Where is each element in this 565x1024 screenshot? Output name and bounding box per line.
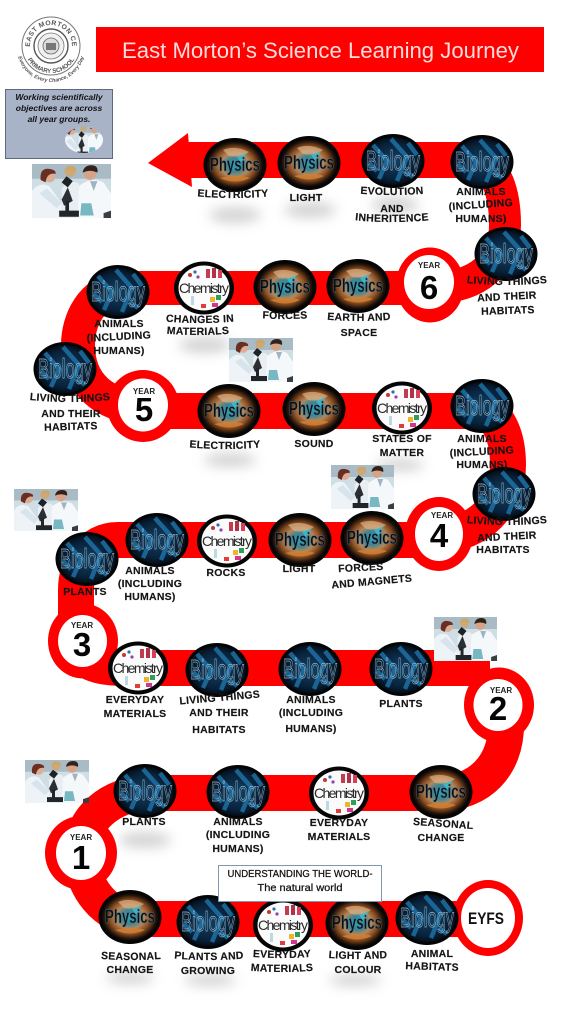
badge: Physics, light and colour: Physics	[332, 913, 382, 934]
badge: Chemistry, everyday materials Y2: Chemistry	[113, 660, 163, 676]
label: animals Y2	[279, 694, 343, 735]
label: living things Y2: HABITATS	[192, 724, 246, 736]
badge: Physics, earth and space	[326, 259, 390, 313]
label: forces and magnets	[331, 561, 413, 592]
label: forces and magnets: AND MAGNETS	[331, 573, 413, 592]
label: rocks: ROCKS	[206, 567, 246, 579]
label: forces and magnets: FORCES	[338, 561, 384, 575]
badge: Physics, seasonal change Y1: Physics	[416, 782, 466, 803]
label: changes in materials	[166, 314, 234, 336]
label: animal habitats: ANIMAL	[411, 948, 453, 960]
year marker: 5: 5	[135, 391, 153, 428]
note: understanding the world	[218, 866, 382, 902]
badge: Biology, plants and growing: Biology	[181, 906, 235, 937]
badge: Physics, seasonal change Y1	[410, 765, 472, 819]
label: earth and space	[328, 312, 390, 339]
label: living things Y6: LIVING THINGS	[467, 276, 547, 286]
badge: Biology, animals Y4: Biology	[455, 390, 509, 421]
label: plants Y2: PLANTS	[379, 698, 423, 710]
label: plants Y3: PLANTS	[63, 586, 107, 598]
label: seasonal change EYFS	[101, 952, 161, 976]
logo: school crest: EAST MORTON CE	[25, 20, 77, 46]
badge: Physics, electricity Y4	[198, 384, 260, 438]
label: animals Y3: ANIMALS	[125, 565, 175, 577]
logo: school crest	[18, 16, 84, 82]
badge: Physics, light Y6	[278, 136, 340, 190]
year marker: 4: 4	[430, 517, 449, 554]
badge: Physics, electricity Y4: Physics	[204, 401, 254, 422]
photo: scientists at microscope	[14, 489, 78, 531]
badge: Biology, living things Y2: Biology	[190, 654, 244, 685]
label: living things Y2: LIVING THINGS	[179, 689, 261, 708]
label: animals Y3	[118, 565, 182, 603]
label: animals Y5: (INCLUDING	[86, 329, 151, 345]
label: living things Y4	[467, 516, 547, 556]
label: evolution and inheritence: INHERITENCE	[356, 213, 428, 222]
logo: school crest: Everyone, Every Chance, Every Day	[18, 56, 84, 82]
year marker: 2	[464, 668, 534, 742]
label: animals Y1: (INCLUDING	[206, 829, 270, 841]
badge: Physics, forces Y5	[254, 260, 316, 314]
label: animals Y4: HUMANS)	[456, 459, 508, 471]
label: everyday materials EYFS: MATERIALS	[251, 964, 313, 972]
badge: Biology, animals Y2: Biology	[283, 653, 337, 684]
badge: Chemistry, changes in materials: Chemistry	[179, 280, 229, 296]
label: living things Y5: LIVING THINGS	[30, 392, 110, 402]
label: living things Y6	[467, 276, 547, 318]
label: animals Y2: ANIMALS	[286, 694, 336, 706]
badge: Physics, earth and space: Physics	[333, 276, 383, 297]
label: everyday materials Y2: EVERYDAY	[106, 694, 164, 706]
badge: Biology, plants Y1: Biology	[118, 775, 172, 806]
year marker: 1: 1	[72, 839, 90, 876]
label: states of matter	[372, 433, 432, 459]
label shadows	[106, 197, 424, 986]
photo: scientists at microscope	[229, 338, 293, 382]
label: everyday materials EYFS	[251, 950, 313, 972]
badge: Physics, light Y3: Physics	[275, 530, 325, 551]
label: living things Y2	[179, 689, 261, 736]
badge: Biology, animals Y1: Biology	[211, 776, 265, 807]
badge: Biology, animals Y2	[278, 642, 342, 696]
label: animals Y5: ANIMALS	[94, 318, 144, 330]
badge: Chemistry, everyday materials EYFS	[253, 898, 313, 952]
label: plants and growing: PLANTS AND	[174, 951, 243, 960]
label: plants and growing	[174, 951, 243, 977]
label: animals Y5: HUMANS)	[93, 345, 145, 357]
badge: Chemistry, states of matter	[372, 382, 432, 434]
label: electricity Y4: ELECTRICITY	[190, 440, 260, 450]
label: living things Y5	[30, 392, 110, 434]
badge: Biology, animals Y4	[450, 379, 514, 433]
label: evolution and inheritence: EVOLUTION	[360, 186, 423, 196]
badge: Biology, evolution Y6: Biology	[366, 145, 420, 176]
year marker: 6	[396, 248, 464, 322]
callout: working scientifically note: all year groups.	[28, 114, 90, 124]
photo: scientists at microscope	[32, 164, 111, 218]
label: seasonal change EYFS: CHANGE	[106, 964, 154, 976]
label: living things Y4: AND THEIR	[477, 529, 537, 545]
label: animals Y5	[86, 318, 151, 357]
label: seasonal change Y1: CHANGE	[417, 832, 465, 844]
label: evolution and inheritence: AND	[380, 203, 404, 215]
badge: Biology, animals Y5: Biology	[91, 276, 145, 307]
year marker: 4: YEAR	[431, 511, 453, 520]
year marker: 4	[405, 497, 473, 571]
badge: Biology, animals Y6	[450, 135, 514, 189]
badge: Chemistry, rocks	[197, 514, 257, 568]
badge: Biology, plants Y2	[370, 642, 432, 696]
label: living things Y5: HABITATS	[44, 420, 98, 434]
journey road	[76, 133, 508, 919]
year marker: 3: YEAR	[71, 621, 93, 630]
badge: Biology, evolution Y6	[362, 134, 424, 188]
label: forces Y5: FORCES	[263, 311, 307, 320]
badge: Physics, seasonal change EYFS: Physics	[105, 907, 155, 928]
label: earth and space: EARTH AND	[328, 312, 390, 322]
badge: Biology, living things Y2	[186, 643, 248, 697]
badge: Biology, animals Y5	[86, 265, 150, 319]
label: earth and space: SPACE	[341, 327, 377, 339]
label: seasonal change Y1: SEASONAL	[413, 816, 474, 832]
badge: Physics, forces Y5: Physics	[260, 277, 310, 298]
badge: Physics, forces and magnets: Physics	[347, 528, 397, 549]
label: animals Y1	[206, 816, 270, 855]
badge: Physics, forces and magnets	[340, 511, 404, 565]
label: everyday materials EYFS: EVERYDAY	[253, 950, 310, 958]
badge: Biology, animals Y1	[206, 765, 270, 819]
label: states of matter: MATTER	[380, 447, 424, 459]
badge: Physics, electricity Y6	[204, 138, 266, 192]
badge: Biology, animal habitats: Biology	[400, 902, 454, 933]
year marker: 5: YEAR	[133, 387, 155, 396]
note: understanding the world: UNDERSTANDING THE WORLD-	[228, 869, 372, 880]
badge: Physics, light Y6: Physics	[284, 153, 334, 174]
year marker: 6: 6	[420, 269, 438, 306]
badge: Biology, living things Y5	[34, 342, 96, 396]
badge: Biology, animals Y3	[126, 513, 188, 567]
label: living things Y6: HABITATS	[481, 304, 535, 318]
label: animal habitats	[405, 948, 459, 974]
label: animals Y4: (INCLUDING	[449, 444, 514, 460]
badge: Chemistry, states of matter: Chemistry	[377, 400, 427, 416]
label: electricity Y6: ELECTRICITY	[198, 189, 268, 198]
badge: Biology, plants Y2: Biology	[374, 653, 428, 684]
label: changes in materials: MATERIALS	[167, 326, 229, 336]
label: animals Y1: ANIMALS	[213, 816, 263, 828]
logo: school crest: PRIMARY SCHOOL	[28, 58, 74, 73]
badge: Chemistry, rocks: Chemistry	[202, 533, 252, 549]
year marker: 6: YEAR	[418, 261, 440, 270]
year marker: 1	[45, 816, 117, 890]
label: animals Y1: HUMANS)	[212, 843, 264, 855]
note: understanding the world: The natural world	[258, 883, 342, 894]
badge: Chemistry, changes in materials	[174, 262, 234, 314]
label: animals Y6: HUMANS)	[455, 213, 507, 225]
badge: Biology, living things Y5: Biology	[38, 353, 92, 384]
photo: scientists at microscope	[331, 465, 394, 509]
badge: Physics, electricity Y6: Physics	[210, 155, 260, 176]
badge: Chemistry, everyday materials Y1	[309, 766, 369, 820]
label: living things Y4: LIVING THINGS	[467, 516, 547, 526]
label: living things Y4: HABITATS	[476, 544, 530, 556]
badge: Biology, animals Y3: Biology	[130, 524, 184, 555]
label: animal habitats: HABITATS	[405, 960, 459, 974]
badge: Biology, animals Y6: Biology	[455, 146, 509, 177]
label: seasonal change Y1	[413, 816, 474, 844]
label: plants Y1: PLANTS	[122, 816, 166, 828]
photo: scientists at microscope	[25, 760, 89, 803]
label: living things Y6: AND THEIR	[477, 289, 537, 305]
label: everyday materials Y1: MATERIALS	[308, 831, 370, 843]
badge: Physics, light Y3	[268, 513, 332, 567]
badge: Physics, seasonal change EYFS	[98, 890, 162, 944]
badge: Biology, living things Y6	[474, 227, 538, 281]
year marker: 1: YEAR	[70, 833, 92, 842]
label: light Y6: LIGHT	[290, 192, 323, 204]
badge: Biology, plants Y1	[114, 764, 176, 818]
label: animals Y4	[449, 433, 514, 471]
photo: scientists at microscope	[434, 617, 497, 661]
start marker: EYFS: EYFS	[468, 909, 504, 928]
badge: Chemistry, everyday materials EYFS: Chemistry	[258, 917, 308, 933]
year marker: 2: YEAR	[490, 686, 512, 695]
label: seasonal change EYFS: SEASONAL	[101, 952, 161, 960]
label: sound: SOUND	[294, 438, 334, 450]
year marker: 3	[48, 604, 118, 678]
label: animals Y3: HUMANS)	[124, 591, 176, 603]
title banner	[96, 27, 544, 72]
badge: Biology, plants and growing	[176, 895, 240, 949]
label: living things Y5: AND THEIR	[41, 408, 101, 420]
year marker: 2: 2	[489, 690, 507, 727]
badge: Chemistry, everyday materials Y1: Chemistry	[314, 785, 364, 801]
badge: Biology, animal habitats	[396, 891, 458, 945]
badge: Physics, light and colour	[326, 896, 388, 950]
start marker: EYFS	[453, 880, 523, 956]
label: animals Y2: (INCLUDING	[279, 707, 343, 719]
badge: Biology, plants Y3	[56, 532, 118, 586]
label: animals Y2: HUMANS)	[285, 723, 337, 735]
label: light and colour	[329, 950, 387, 976]
label: animals Y3: (INCLUDING	[118, 578, 182, 590]
label: states of matter: STATES OF	[372, 433, 432, 445]
label: animals Y6: (INCLUDING	[448, 197, 513, 213]
badge: Chemistry, everyday materials Y2	[108, 642, 168, 694]
label: plants and growing: GROWING	[181, 965, 235, 977]
year marker: 3: 3	[73, 626, 91, 663]
badge: Physics, sound	[282, 382, 346, 436]
callout: working scientifically note: Working scientifically	[15, 92, 104, 102]
label: light Y3: LIGHT	[283, 563, 316, 575]
year marker: 5	[107, 370, 179, 442]
callout: working scientifically note: objectives are across	[16, 103, 102, 113]
label: living things Y2: AND THEIR	[189, 707, 249, 719]
label: everyday materials Y2: MATERIALS	[104, 708, 166, 720]
title banner: East Morton’s Science Learning Journey	[122, 38, 520, 63]
label: animals Y4: ANIMALS	[457, 433, 507, 445]
badge: Physics, sound: Physics	[289, 399, 339, 420]
badge: Biology, living things Y4	[472, 467, 536, 521]
label: animals Y6	[448, 186, 513, 225]
label: evolution and inheritence	[356, 186, 428, 222]
badge: Biology, plants Y3: Biology	[60, 543, 114, 574]
callout: working scientifically note	[6, 90, 112, 158]
label: changes in materials: CHANGES IN	[166, 314, 234, 324]
label: animals Y6: ANIMALS	[456, 186, 506, 198]
label: light and colour: COLOUR	[334, 964, 382, 976]
label: everyday materials Y1	[308, 817, 370, 843]
label: light and colour: LIGHT AND	[329, 950, 387, 960]
label: everyday materials Y1: EVERYDAY	[310, 817, 368, 829]
label: everyday materials Y2	[104, 694, 166, 720]
